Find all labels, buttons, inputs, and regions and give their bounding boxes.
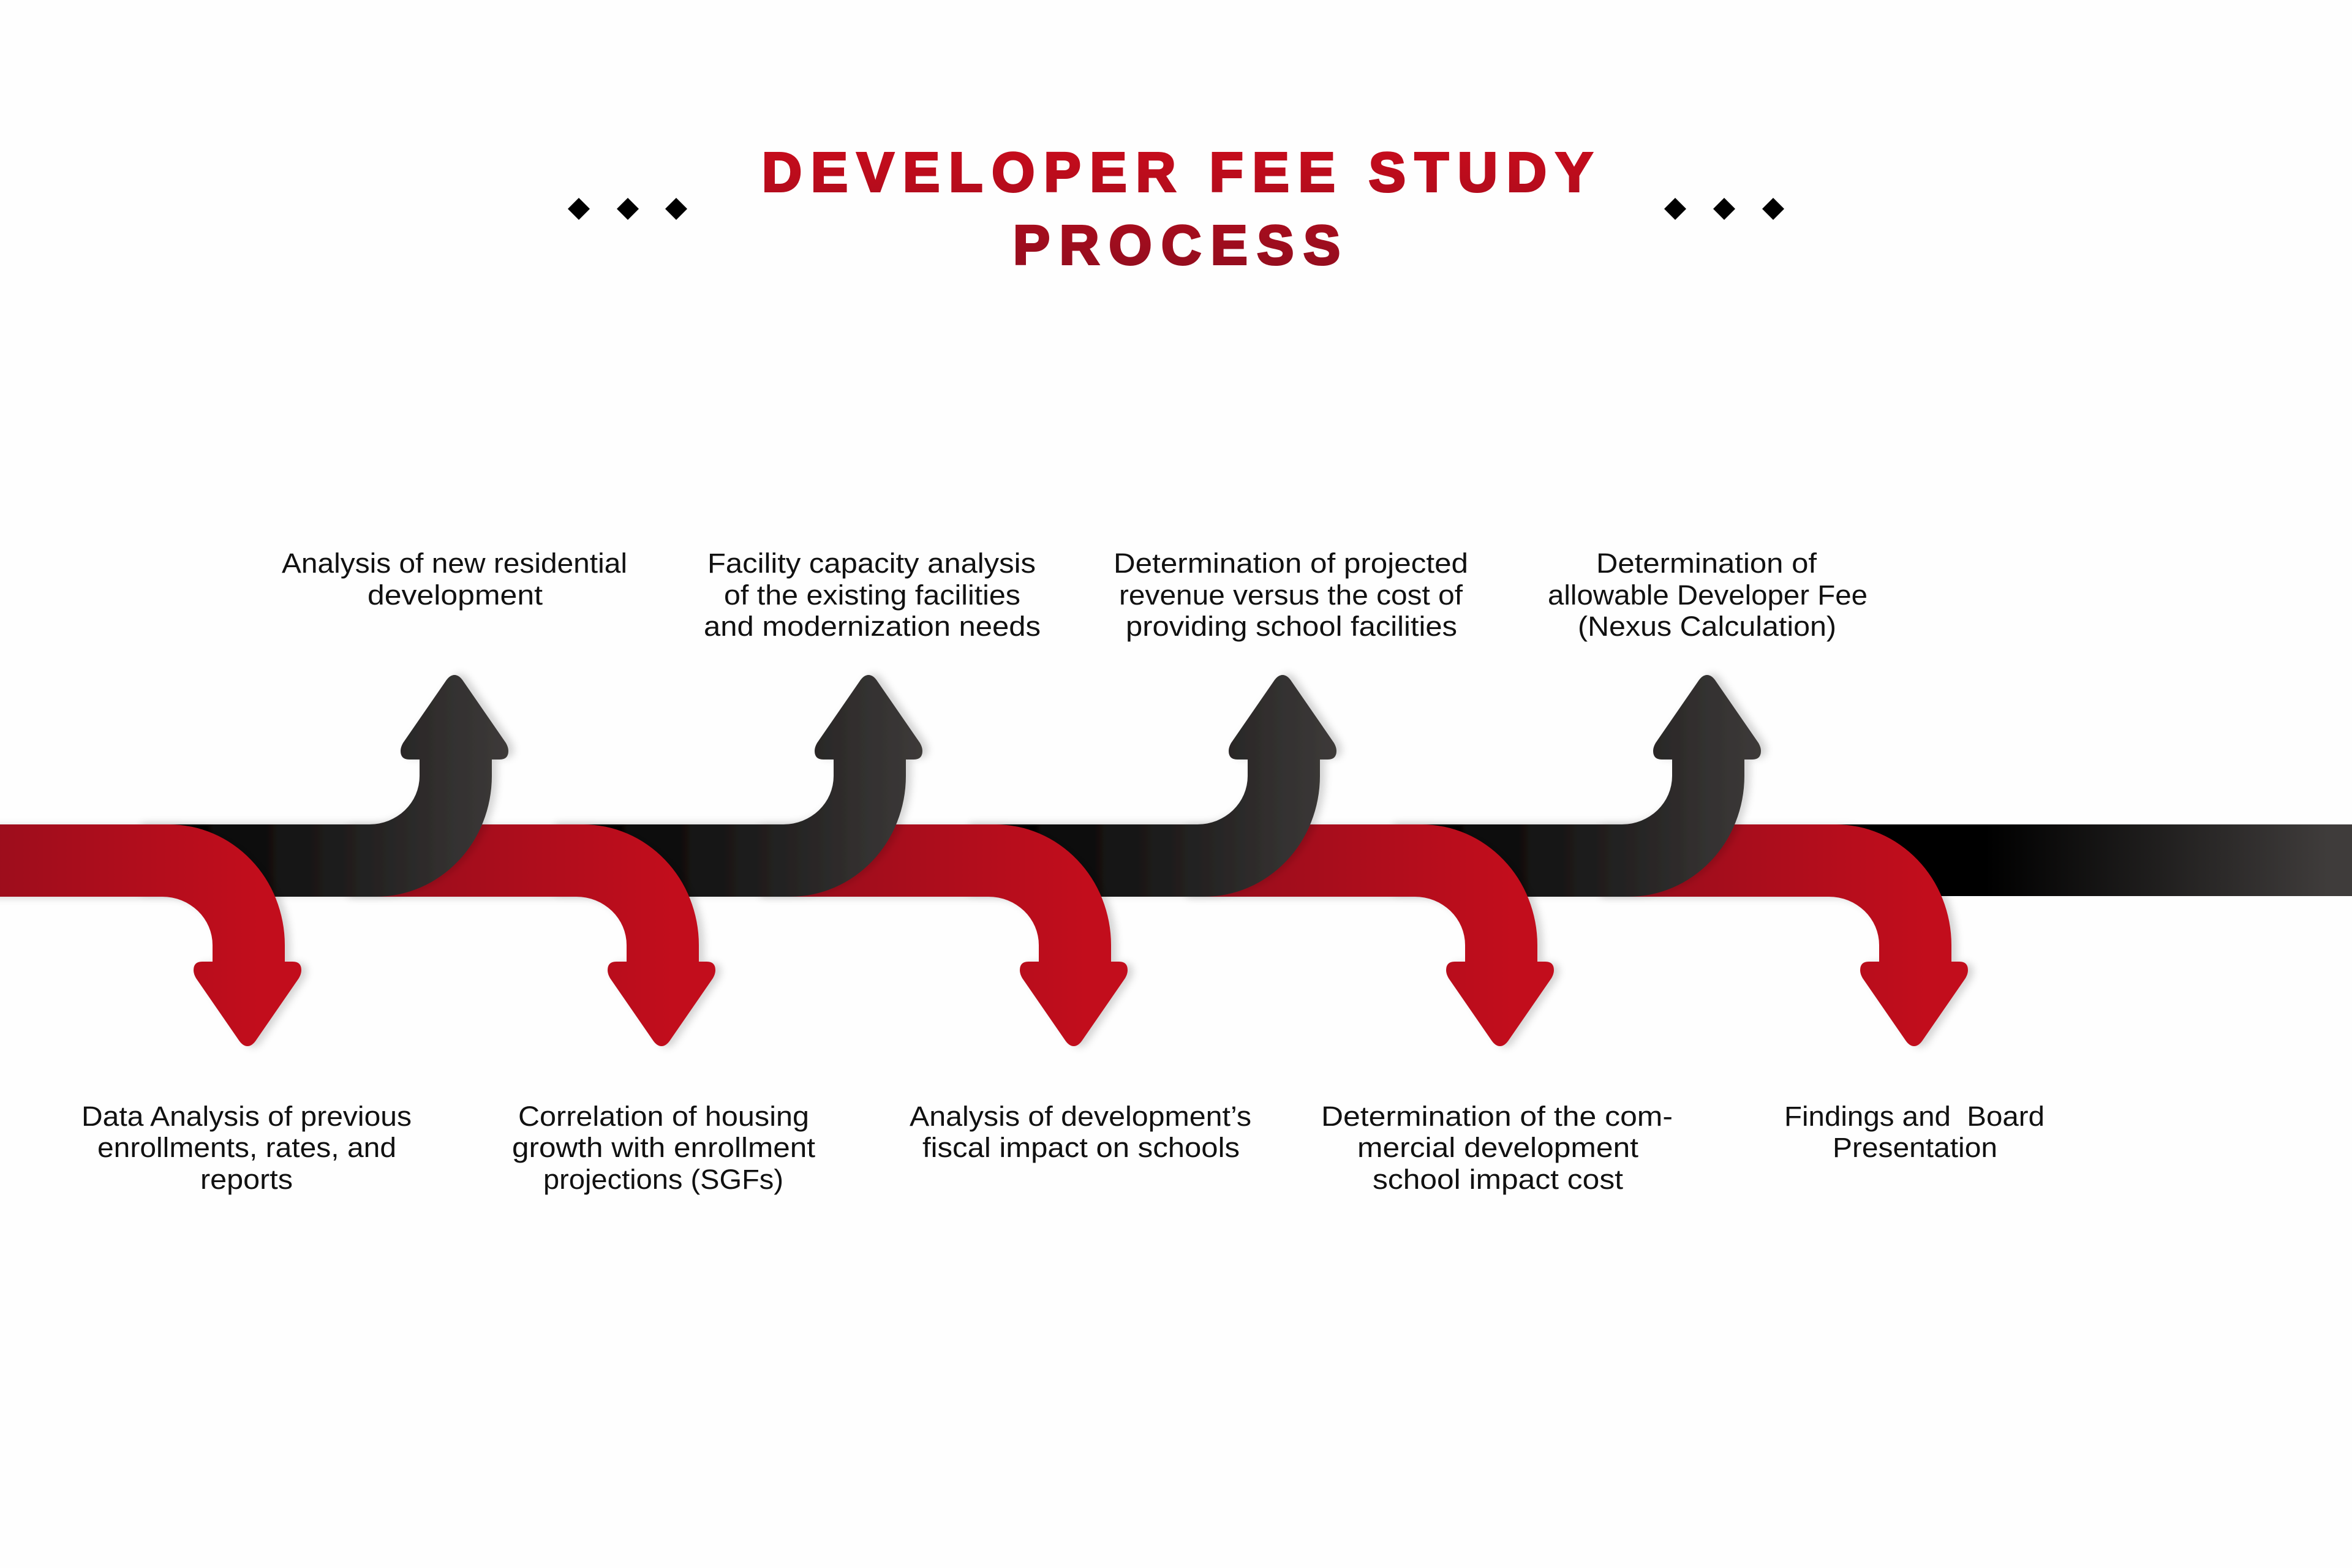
text: commercial development impact: Determination of the com- <box>1321 1101 1673 1132</box>
text: commercial development impact: mercial development <box>1357 1132 1639 1163</box>
text: analysis of new residential development: development <box>368 579 543 611</box>
text: correlation of housing growth: growth with enrollment <box>512 1132 816 1163</box>
text: correlation of housing growth <box>512 1101 816 1195</box>
text: commercial development impact: school impact cost <box>1373 1164 1624 1195</box>
text: facility capacity analysis: Facility capacity analysis <box>707 548 1036 579</box>
arrow: black step 6 <box>964 675 1336 897</box>
text: data analysis: Data Analysis of previous <box>81 1101 412 1132</box>
arrow: red step 7 <box>1182 824 1554 1046</box>
icon: right diamonds <box>1664 198 1784 220</box>
title: PROCESS <box>1013 215 1340 276</box>
arrow: black step 2 <box>136 675 508 897</box>
text: fiscal impact: fiscal impact on schools <box>922 1132 1240 1163</box>
text: correlation of housing growth: Correlation of housing <box>518 1101 809 1132</box>
text: commercial development impact <box>1321 1101 1673 1195</box>
arrow: red step 3 <box>343 824 715 1046</box>
text: data analysis: reports <box>200 1164 293 1195</box>
text: fiscal impact: Analysis of development’s <box>910 1101 1251 1132</box>
text: findings and board presentation: Findings and Board <box>1784 1101 2045 1132</box>
text: findings and board presentation <box>1784 1101 2045 1163</box>
text: allowable developer fee: (Nexus Calculation) <box>1578 611 1836 642</box>
text: projected revenue versus cost: Determination of projected <box>1114 548 1468 579</box>
text: correlation of housing growth: projections (SGFs) <box>543 1164 783 1195</box>
title: DEVELOPER FEE STUDY <box>762 142 1593 203</box>
title <box>762 142 1593 276</box>
text: analysis of new residential development <box>282 548 627 611</box>
text: data analysis <box>81 1101 412 1195</box>
text: data analysis: enrollments, rates, and <box>97 1132 396 1163</box>
text: facility capacity analysis: and modernization needs <box>704 611 1041 642</box>
text: projected revenue versus cost: revenue versus the cost of <box>1119 579 1463 611</box>
text: facility capacity analysis <box>704 548 1041 642</box>
arrow: black step 4 <box>550 675 922 897</box>
arrow: red step 9 <box>1596 824 1968 1046</box>
arrow: black step 8 <box>1389 675 1761 897</box>
text: allowable developer fee: Determination of <box>1596 548 1817 579</box>
text: fiscal impact <box>910 1101 1251 1163</box>
timeline tail band <box>1807 824 2352 896</box>
text: findings and board presentation: Presentation <box>1833 1132 1997 1163</box>
text: allowable developer fee <box>1548 548 1868 642</box>
icon: left diamonds <box>568 198 687 220</box>
arrow: red step 1 <box>0 824 301 1046</box>
text: projected revenue versus cost: providing school facilities <box>1126 611 1457 642</box>
text: facility capacity analysis: of the existing facilities <box>724 579 1020 611</box>
arrow: red step 5 <box>755 824 1128 1046</box>
text: projected revenue versus cost <box>1114 548 1468 642</box>
text: allowable developer fee: allowable Developer Fee <box>1548 579 1868 611</box>
text: analysis of new residential development: Analysis of new residential <box>282 548 627 579</box>
